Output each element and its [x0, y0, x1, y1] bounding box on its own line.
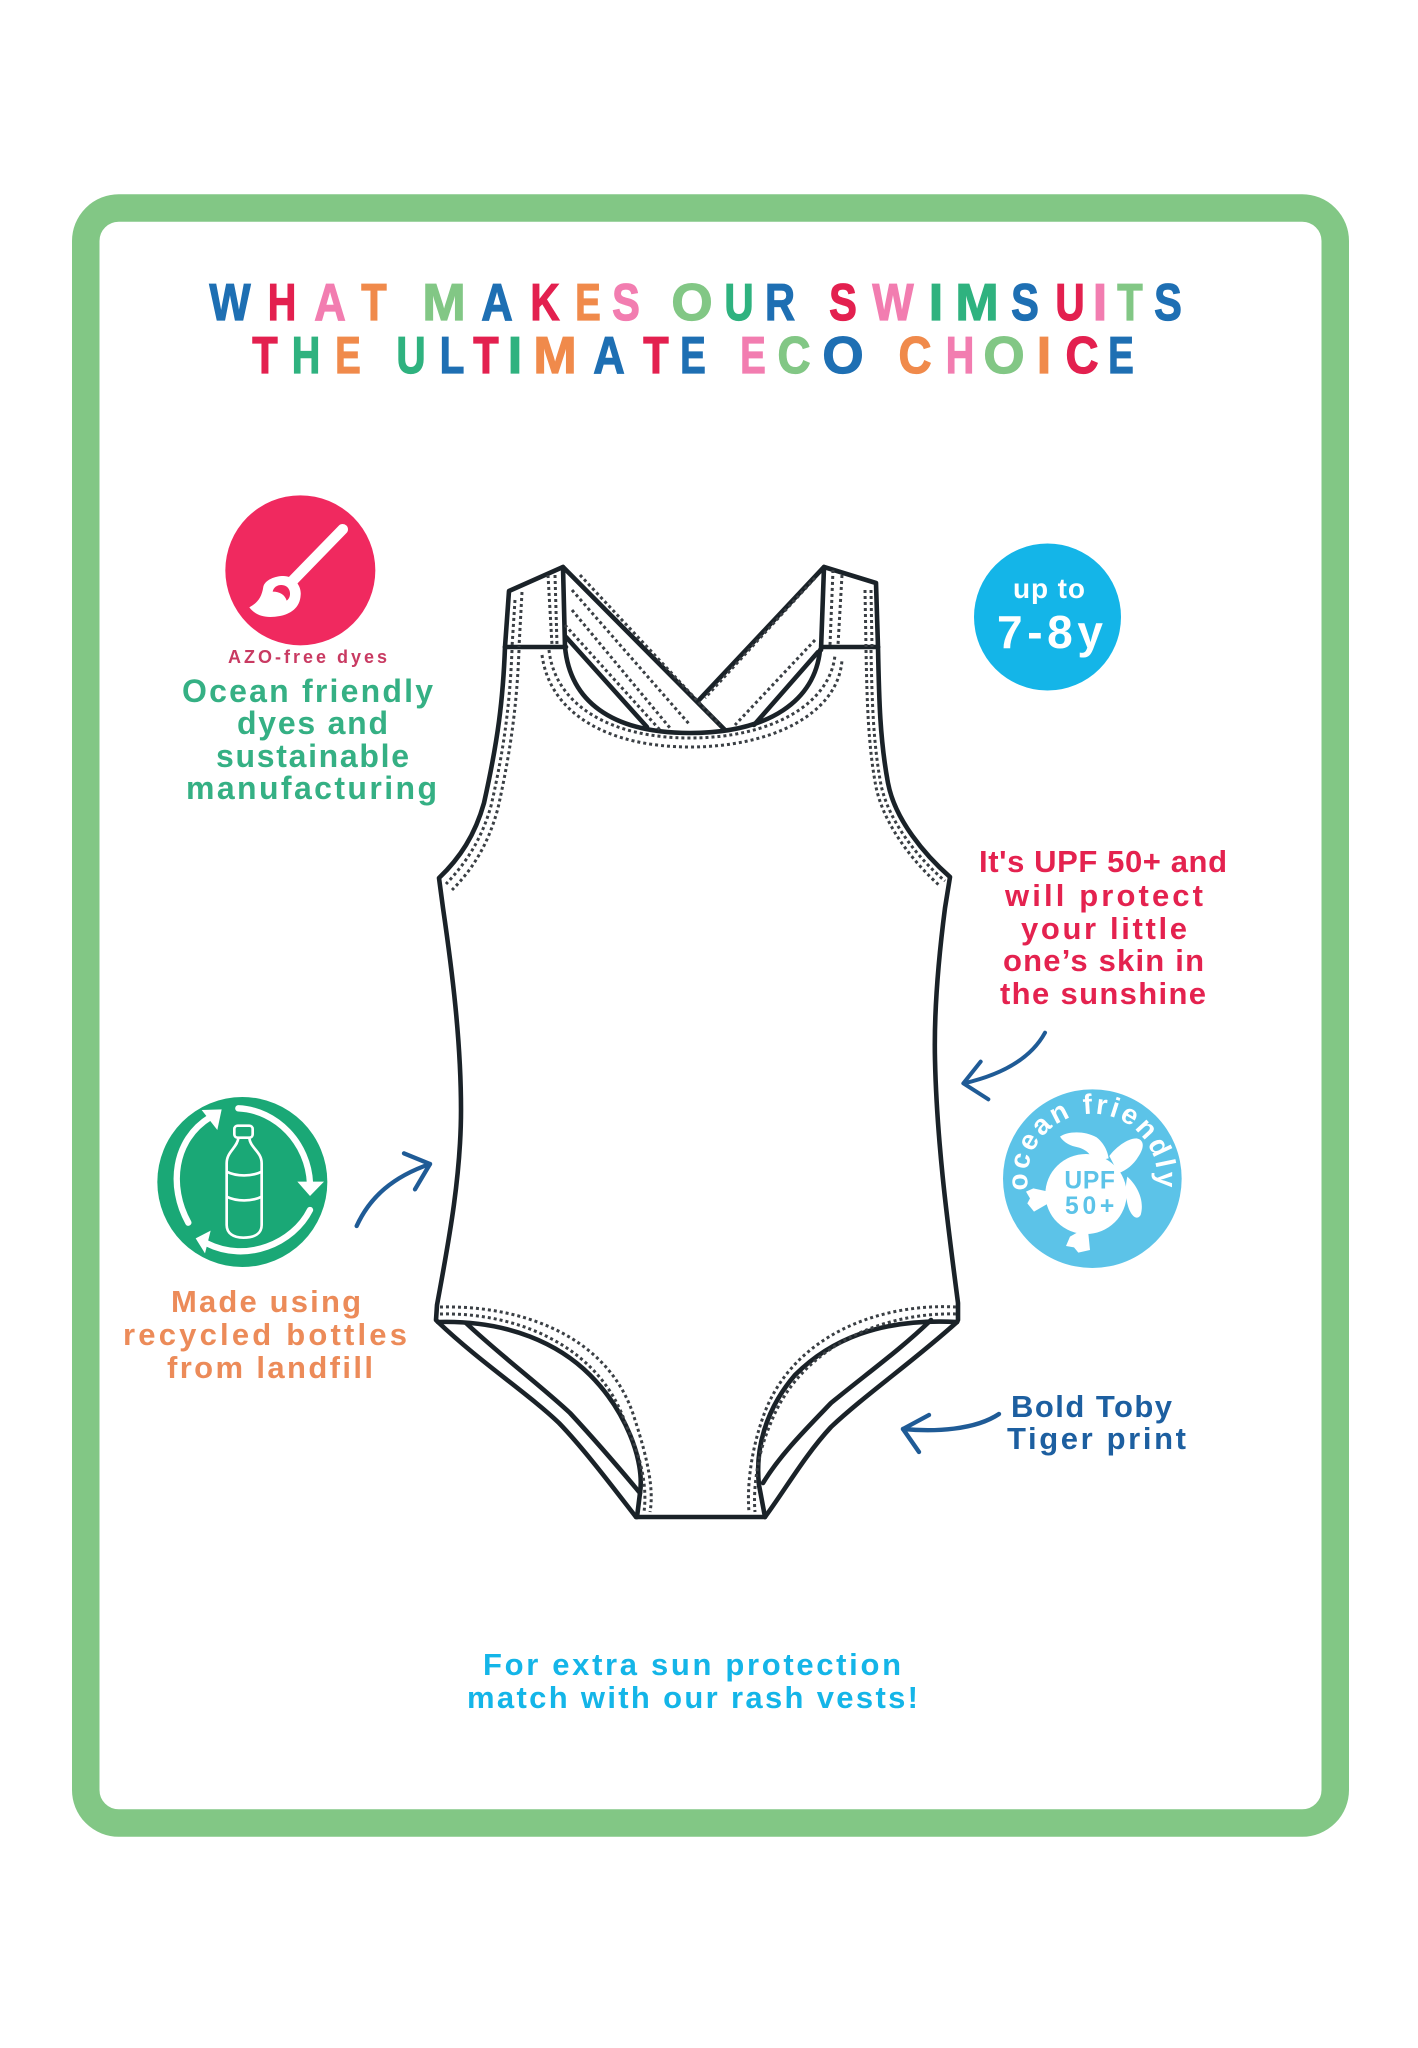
- title: I: [508, 327, 522, 385]
- title: S: [829, 273, 857, 331]
- title: S: [1011, 273, 1039, 331]
- title: T: [643, 326, 669, 384]
- title: M: [533, 327, 577, 385]
- icon: ocean friendly UPF 50+ turtle badge: ocean friendly: [1012, 1093, 1176, 1190]
- title: E: [575, 273, 601, 331]
- title: R: [765, 273, 795, 331]
- title: L: [440, 326, 464, 384]
- badge: up to 7-8y: 7-8y: [997, 606, 1103, 658]
- title: E: [1108, 326, 1134, 384]
- title: A: [593, 328, 625, 385]
- swimsuit outline and straps: [436, 567, 958, 1517]
- text block: ocean friendly dyes: dyes and: [237, 705, 388, 741]
- badge: up to 7-8y: [974, 544, 1121, 690]
- text block: UPF protection: [979, 844, 1227, 1011]
- text block: ocean friendly dyes: Ocean friendly: [182, 673, 433, 709]
- panel: green rounded frame: [86, 208, 1335, 1823]
- text block: Bold Toby Tiger print: Tiger print: [1007, 1421, 1186, 1456]
- title: O: [822, 326, 864, 385]
- title: H: [292, 326, 320, 384]
- text block: UPF protection: the sunshine: [1000, 976, 1206, 1011]
- text block: UPF protection: your little: [1021, 911, 1187, 946]
- title: O: [671, 273, 713, 332]
- text block: Bold Toby Tiger print: [1007, 1389, 1186, 1456]
- text block: ocean friendly dyes: sustainable: [216, 738, 409, 774]
- arrow: recycled bottle to swimsuit: [357, 1153, 430, 1226]
- title: U: [1055, 273, 1085, 331]
- text block: recycled bottles: recycled bottles: [123, 1317, 407, 1352]
- title: A: [314, 275, 346, 332]
- title: T: [361, 273, 387, 331]
- title: I: [1037, 327, 1051, 385]
- icon: ocean friendly UPF 50+ turtle badge: 50+: [1065, 1193, 1114, 1220]
- text block: UPF protection: It's UPF 50+ and: [979, 844, 1227, 879]
- title: C: [898, 327, 932, 385]
- swimsuit line drawing: [436, 567, 958, 1517]
- title: M: [422, 274, 466, 332]
- title: H: [268, 273, 296, 331]
- arrow: tiger print to swimsuit: [903, 1414, 999, 1452]
- title: W: [209, 275, 251, 332]
- text block: rash vests footer: match with our rash vests!: [467, 1680, 918, 1715]
- text block: rash vests footer: For extra sun protection: [483, 1647, 901, 1682]
- icon: red paint brush badge: [225, 495, 375, 645]
- text block: UPF protection: will protect: [1004, 878, 1203, 913]
- title: E: [740, 326, 766, 384]
- title: E: [680, 326, 706, 384]
- icon: recycled bottle badge: [157, 1097, 327, 1267]
- text block: ocean friendly dyes: manufacturing: [186, 770, 437, 806]
- text block: recycled bottles: Made using: [171, 1284, 361, 1319]
- text block: rash vests footer: [467, 1647, 918, 1715]
- title: T: [473, 326, 499, 384]
- title: I: [1093, 274, 1107, 332]
- title: U: [396, 326, 426, 384]
- title: O: [983, 326, 1025, 385]
- text block: recycled bottles: from landfill: [167, 1350, 373, 1385]
- stitching: [440, 570, 956, 1512]
- title: S: [612, 273, 640, 331]
- title: K: [530, 273, 560, 331]
- text block: ocean friendly dyes: [182, 673, 437, 806]
- title: T: [252, 326, 278, 384]
- title: S: [1154, 273, 1182, 331]
- title: C: [777, 327, 811, 385]
- title: A: [481, 275, 513, 332]
- title: W: [872, 275, 914, 332]
- title: E: [335, 326, 361, 384]
- badge: up to 7-8y: up to: [1013, 573, 1085, 604]
- title: M: [955, 274, 999, 332]
- icon: ocean friendly UPF 50+ turtle badge: UPF: [1064, 1168, 1115, 1195]
- title: U: [724, 273, 754, 331]
- turtle: [1026, 1132, 1143, 1253]
- title: T: [1117, 273, 1143, 331]
- icon: ocean friendly UPF 50+ turtle badge: [1003, 1089, 1182, 1268]
- title: C: [1065, 327, 1099, 385]
- text block: Bold Toby Tiger print: Bold Toby: [1011, 1389, 1173, 1424]
- arrow: to swimsuit from UPF text: [963, 1033, 1045, 1099]
- text block: recycled bottles: [123, 1284, 407, 1385]
- text: AZO-free dyes: AZO-free dyes: [228, 647, 387, 667]
- title: I: [929, 274, 943, 332]
- title: [209, 273, 1182, 385]
- text block: UPF protection: one’s skin in: [1003, 943, 1204, 978]
- title: H: [946, 326, 974, 384]
